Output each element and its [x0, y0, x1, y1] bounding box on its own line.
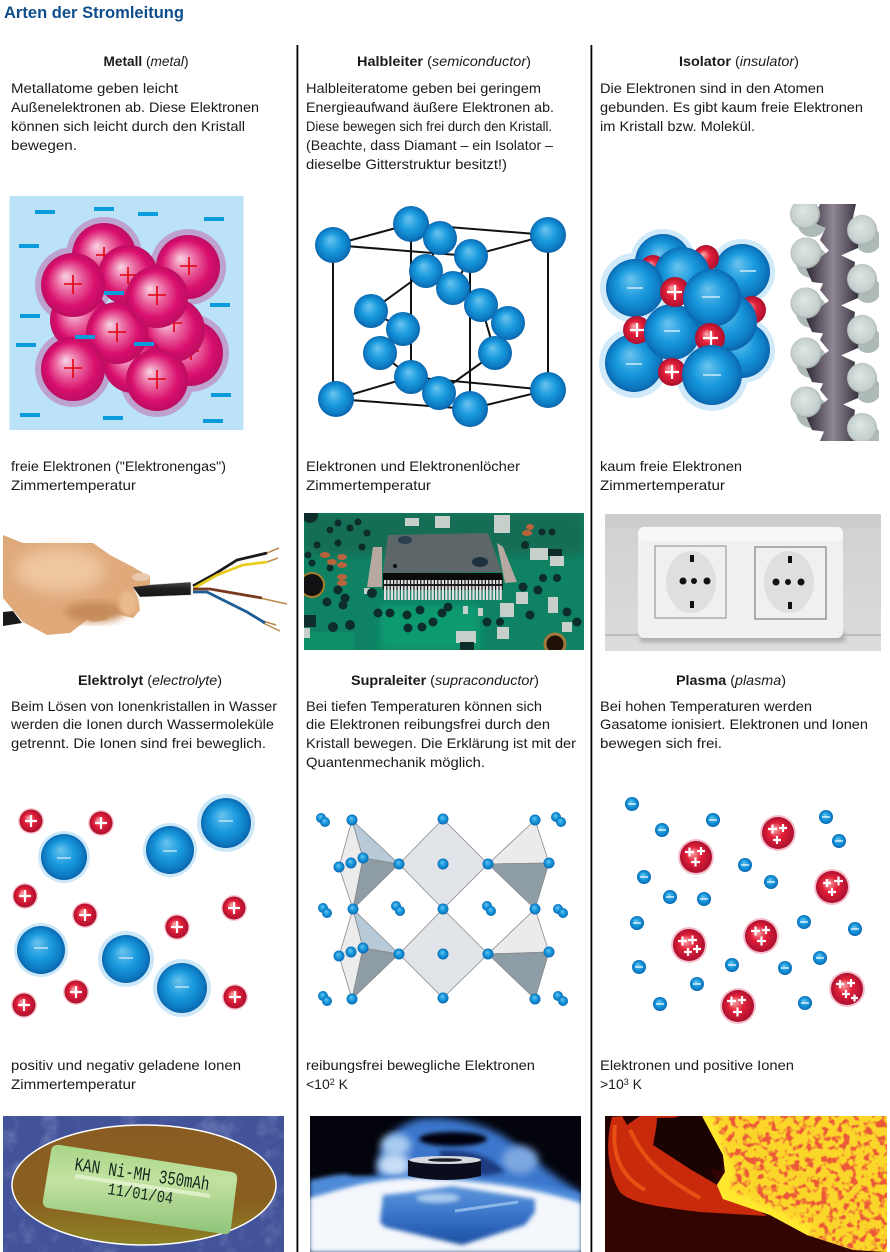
- caption: Halbleiter: Elektronen und Elektronenlöcher: [306, 458, 520, 474]
- text block: Halbleiter description: Halbleiteratome geben bei geringem: [306, 80, 541, 96]
- diagram: metal lattice with free electrons: [10, 196, 244, 430]
- panel: Halbleiter heading: Halbleiter (semiconductor): [357, 53, 531, 69]
- text block: Supraleiter description: Kristall bewegen. Die Erklärung ist mit der: [306, 735, 576, 751]
- caption: Isolator: kaum freie Elektronen: [600, 458, 742, 474]
- caption: Plasma: >10: [600, 1076, 624, 1092]
- caption: Elektrolyt: [11, 1057, 241, 1092]
- diagram: polymer molecule chain: [790, 199, 881, 451]
- caption: Elektrolyt: positiv und negativ geladene Ionen: [11, 1057, 241, 1073]
- caption: Supraleiter: <10: [306, 1076, 330, 1092]
- caption: Halbleiter: [306, 458, 520, 493]
- caption: Plasma: K: [629, 1076, 643, 1092]
- caption: Plasma: 3: [624, 1077, 629, 1087]
- caption: Metall: [11, 458, 226, 493]
- photo: hand holding cable: [3, 535, 287, 635]
- photo: circuit board with chip: [300, 507, 584, 654]
- caption: Supraleiter: [306, 1057, 535, 1092]
- diagram: semiconductor crystal lattice: [315, 206, 566, 427]
- text block: Plasma description: Gasatome ionisiert. Elektronen und Ionen: [600, 716, 868, 732]
- panel: Plasma heading: Plasma (plasma): [676, 672, 786, 688]
- panel: Isolator heading: Isolator (insulator): [679, 53, 799, 69]
- diagram: superconductor crystal structure: [316, 812, 568, 1006]
- caption: Elektrolyt: Zimmertemperatur: [11, 1076, 136, 1092]
- panel: Metall heading: Metall (metal): [104, 53, 188, 69]
- caption: Isolator: [600, 458, 742, 493]
- photo: NiMH battery: 11/01/04: [106, 1181, 174, 1210]
- text block: Elektrolyt description: getrennt. Die Ionen sind frei beweglich.: [11, 735, 266, 751]
- caption: Isolator: Zimmertemperatur: [600, 477, 725, 493]
- photo: levitating magnet over superconductor: [310, 1116, 581, 1252]
- text block: Plasma description: [600, 698, 868, 751]
- text block: Metall description: [11, 80, 259, 153]
- caption: Metall: freie Elektronen ("Elektronengas"): [11, 458, 226, 474]
- photo: wall socket: [605, 514, 881, 651]
- caption: Plasma: Elektronen und positive Ionen: [600, 1057, 794, 1073]
- text block: Metall description: Außenelektronen ab. Diese Elektronen: [11, 99, 259, 115]
- text block: Halbleiter description: (Beachte, dass Diamant – ein Isolator –: [306, 137, 553, 153]
- panel: Supraleiter heading: Supraleiter (supraconductor): [351, 672, 539, 688]
- text block: Halbleiter description: [306, 80, 554, 172]
- diagram: ionic crystal: [599, 229, 775, 411]
- text block: Plasma description: bewegen sich frei.: [600, 735, 722, 751]
- text block: Supraleiter description: Quantenmechanik möglich.: [306, 754, 485, 770]
- caption: Supraleiter: reibungsfrei bewegliche Elektronen: [306, 1057, 535, 1073]
- text block: Elektrolyt description: werden die Ionen durch Wassermoleküle: [10, 716, 274, 732]
- title: Arten der Stromleitung: [4, 3, 184, 22]
- text block: Halbleiter description: Diese bewegen sich frei durch den Kristall.: [306, 118, 552, 134]
- text block: Halbleiter description: Energieaufwand äußere Elektronen ab.: [306, 99, 554, 115]
- text block: Supraleiter description: Bei tiefen Temperaturen können sich: [306, 698, 542, 714]
- photo: solar plasma: [605, 1116, 890, 1252]
- text block: Isolator description: [600, 80, 863, 134]
- caption: Halbleiter: Zimmertemperatur: [306, 477, 431, 493]
- photo: NiMH battery: KAN Ni-MH 350mAh: [73, 1154, 211, 1196]
- text block: Isolator description: gebunden. Es gibt kaum freie Elektronen: [600, 99, 863, 115]
- text block: Supraleiter description: die Elektronen reibungsfrei durch den: [306, 716, 550, 732]
- text block: Isolator description: im Kristall bzw. Molekül.: [600, 118, 755, 134]
- photo: NiMH battery: [3, 1116, 284, 1252]
- text block: Elektrolyt description: Beim Lösen von Ionenkristallen in Wasser: [11, 698, 277, 714]
- diagram: dissolved ions: [11, 794, 255, 1018]
- text block: Halbleiter description: dieselbe Gitterstruktur besitzt!): [306, 156, 507, 172]
- caption: Metall: Zimmertemperatur: [11, 477, 136, 493]
- text block: Plasma description: Bei hohen Temperaturen werden: [600, 698, 812, 714]
- caption: Supraleiter: K: [335, 1076, 349, 1092]
- diagram: plasma electrons and ions: [625, 797, 865, 1024]
- text block: Metall description: bewegen.: [11, 137, 77, 153]
- caption: Supraleiter: 2: [330, 1077, 335, 1087]
- text block: Metall description: können sich leicht durch den Kristall: [11, 118, 245, 134]
- text block: Supraleiter description: [306, 698, 576, 770]
- text block: Isolator description: Die Elektronen sind in den Atomen: [600, 80, 824, 96]
- text block: Metall description: Metallatome geben leicht: [11, 80, 178, 96]
- text block: Elektrolyt description: [10, 698, 277, 751]
- panel: Elektrolyt heading: Elektrolyt (electrolyte): [78, 672, 222, 688]
- caption: Plasma: [600, 1057, 794, 1092]
